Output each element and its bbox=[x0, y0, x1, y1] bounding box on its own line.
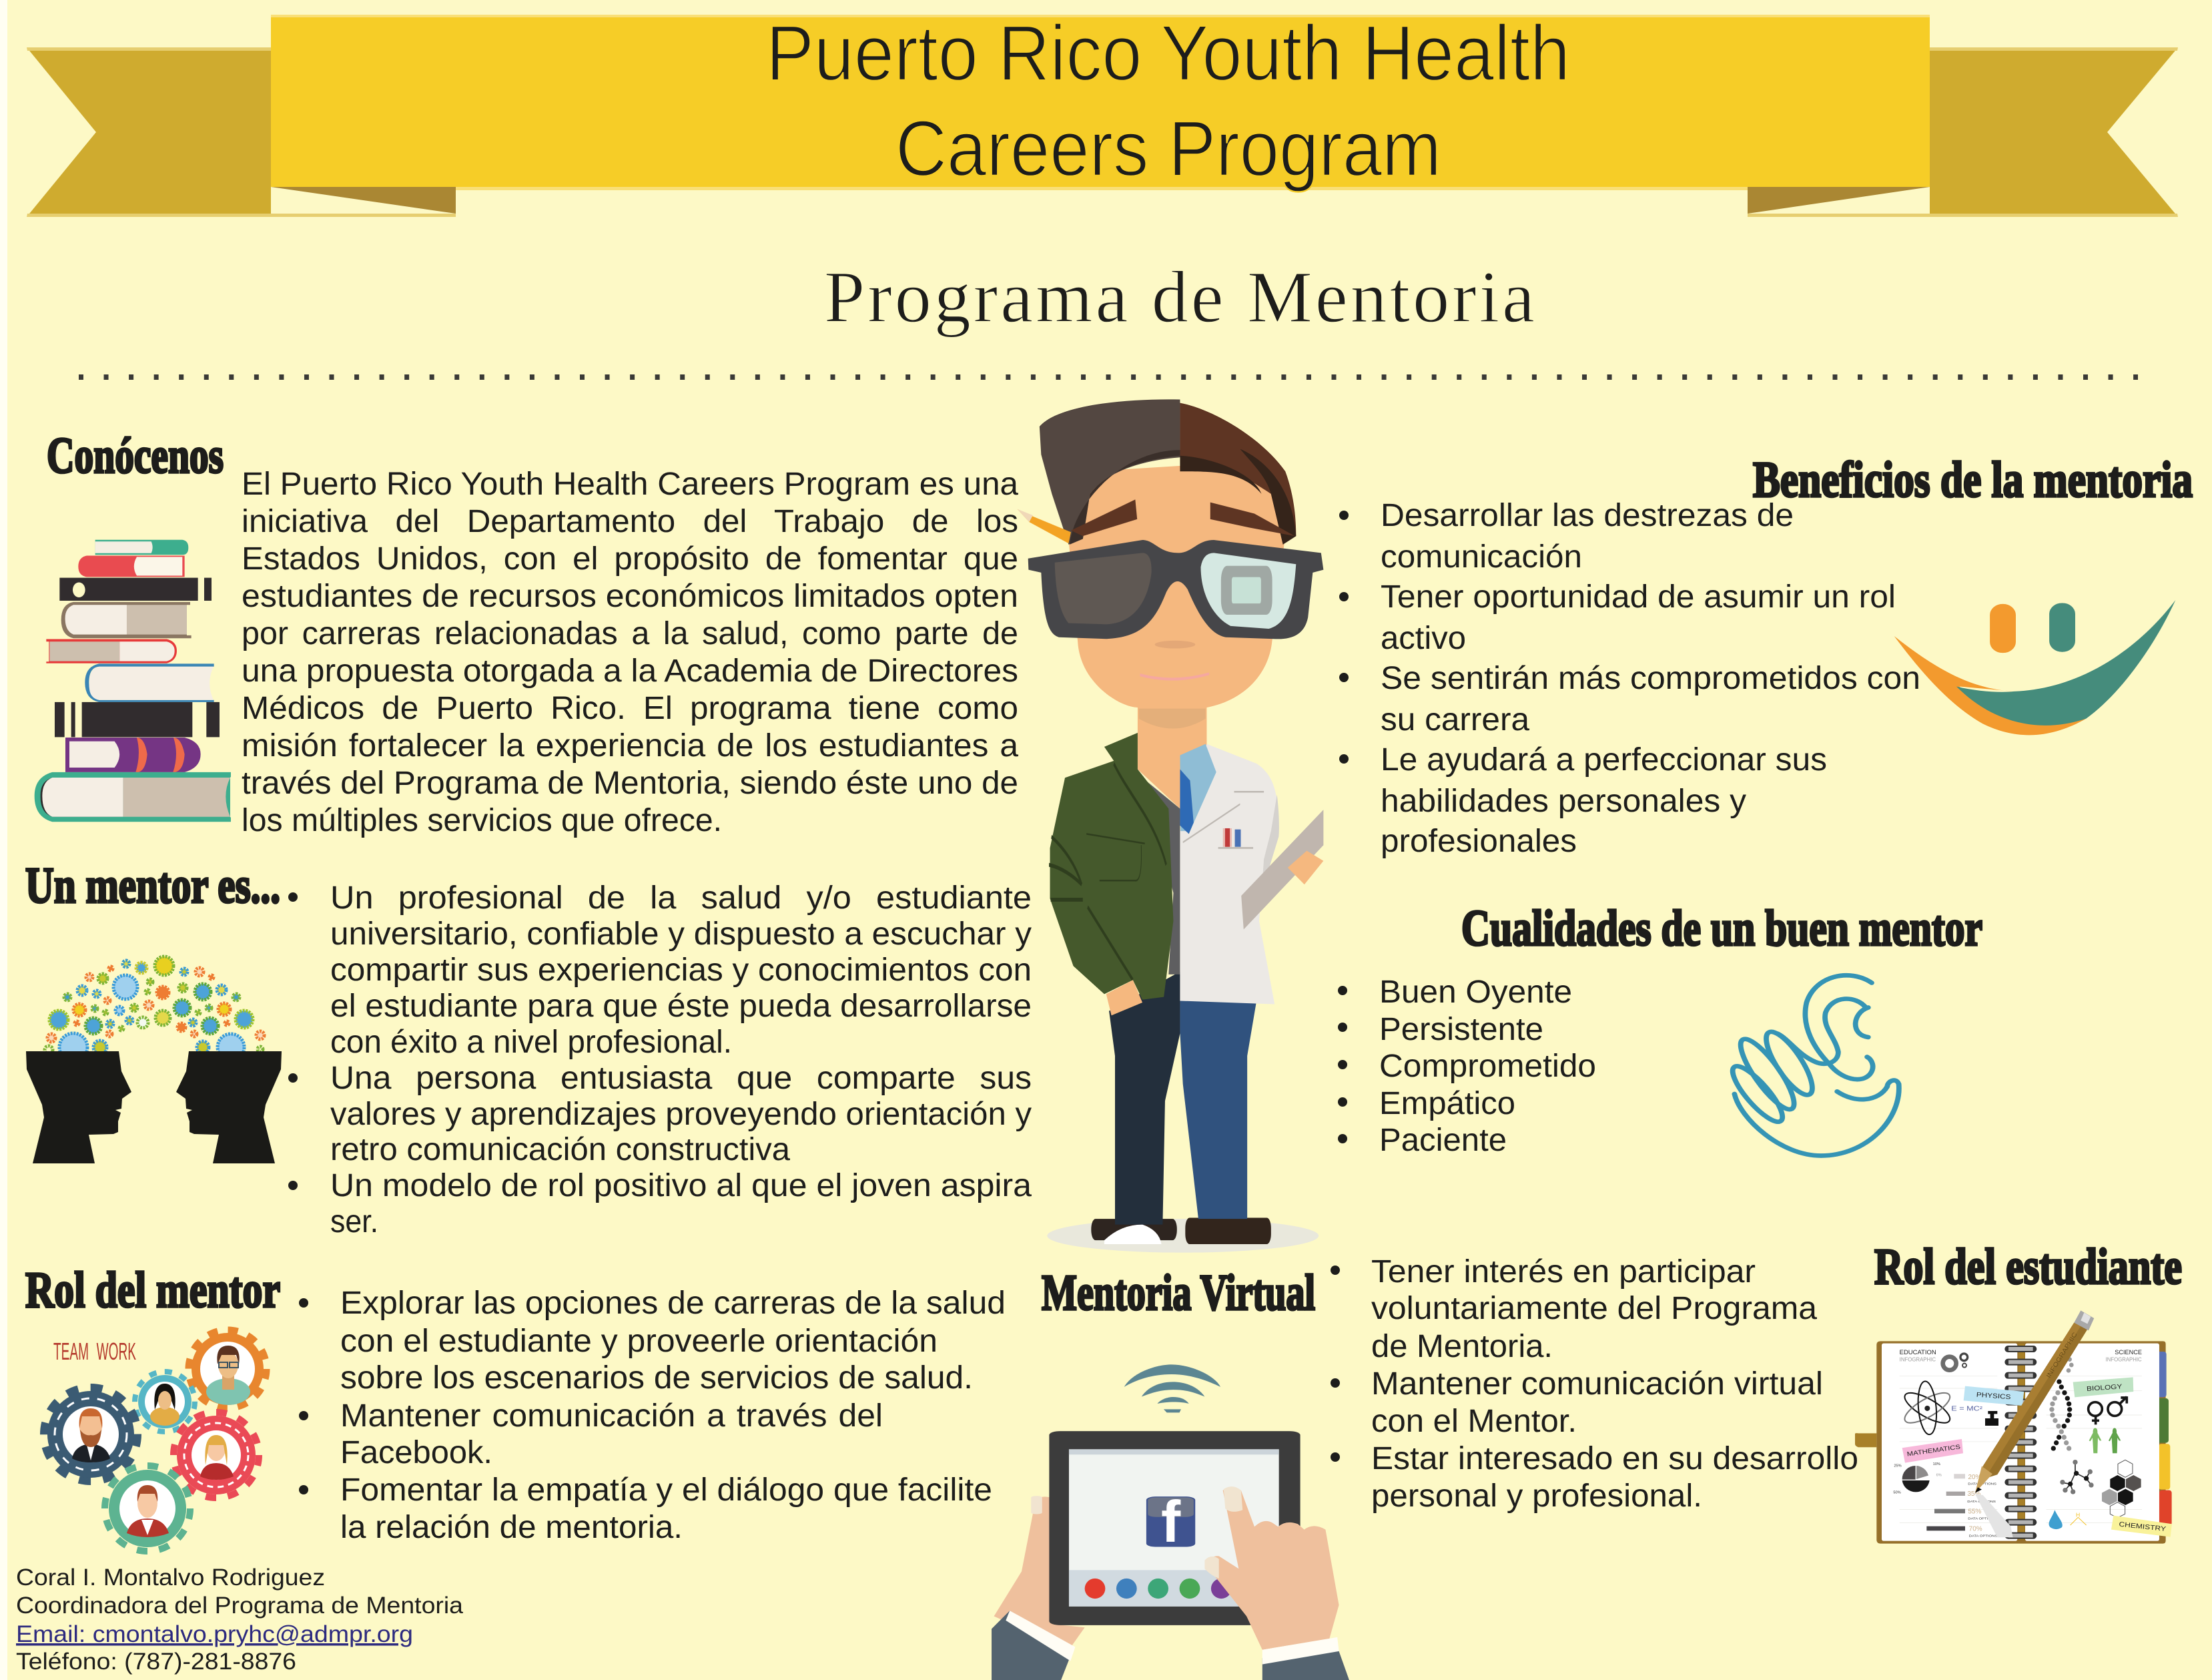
illustration: half student half doctor character bbox=[1018, 399, 1323, 1253]
section: Beneficios de la mentoria bbox=[1339, 452, 2193, 859]
bullet list: Un mentor es: con éxito a nivel profesional. bbox=[330, 1025, 732, 1060]
chart: progress bars: DATA OPTIONS bbox=[1969, 1534, 1997, 1538]
icon: pencil: INFOGRAPHIC bbox=[2045, 1331, 2079, 1379]
icon: dna bbox=[2049, 1357, 2074, 1451]
chart: progress bars: DATA OPTIONS bbox=[1967, 1500, 1996, 1503]
section: Rol del estudiante bbox=[1855, 1239, 2182, 1544]
bullet list: Rol del mentor: Mantener comunicación a través del bbox=[340, 1398, 883, 1434]
chart: progress bars: 35% bbox=[1967, 1490, 1980, 1498]
title bbox=[766, 9, 1570, 193]
icon: hexagons bbox=[2102, 1460, 2141, 1518]
icon: wifi bbox=[1124, 1364, 1220, 1412]
title: Puerto Rico Youth Health bbox=[766, 9, 1570, 97]
chart: pie: 6% bbox=[1936, 1474, 1942, 1478]
note: chemistry bbox=[2111, 1516, 2172, 1537]
bullet list: Un mentor es bbox=[288, 880, 1032, 1239]
bullet list: mentoria virtual: Tener interés en participar bbox=[1371, 1254, 1756, 1290]
chart: pie bbox=[1893, 1462, 1942, 1495]
text block: Conócenos paragraph: Estados Unidos, con el propósito de fomentar que bbox=[242, 541, 1018, 577]
chart: pie: 25% bbox=[1894, 1464, 1902, 1468]
notebook page labels: INFOGRAPHIC bbox=[1900, 1356, 1936, 1362]
contact details: Email: cmontalvo.pryhc@admpr.org bbox=[16, 1621, 413, 1647]
contact details: Coordinadora del Programa de Mentoria bbox=[16, 1593, 464, 1619]
bullet list: beneficios: habilidades personales y bbox=[1381, 784, 1746, 819]
bullet list: Rol del mentor bbox=[299, 1286, 1006, 1545]
icon: pencil bbox=[1975, 1310, 2094, 1493]
bullet list: mentoria virtual: personal y profesional. bbox=[1371, 1478, 1702, 1514]
bullet list: Rol del mentor: Explorar las opciones de carreras de la salud bbox=[340, 1286, 1006, 1321]
bullet list: beneficios: Desarrollar las destrezas de bbox=[1381, 498, 1794, 533]
chart: progress bars: DATA OPTIONS bbox=[1968, 1517, 1996, 1520]
bullet list: beneficios: profesionales bbox=[1381, 824, 1577, 859]
gear: orange bbox=[189, 1330, 266, 1408]
bullet list: Un mentor es: Un modelo de rol positivo al que el joven aspira bbox=[330, 1168, 1032, 1203]
icon: stack of books bbox=[35, 540, 231, 822]
banner ribbon bbox=[27, 15, 2178, 217]
contact details: Teléfono: (787)-281-8876 bbox=[16, 1649, 296, 1675]
text block: Conócenos paragraph: misión fortalecer la experiencia de los estudiantes a bbox=[242, 728, 1018, 764]
bullet list: beneficios: Le ayudará a perfeccionar sus bbox=[1381, 742, 1827, 778]
note: physics bbox=[1964, 1386, 2024, 1406]
chart: pie: 50% bbox=[1893, 1491, 1901, 1495]
heading: Cualidades: Cualidades de un buen mentor bbox=[1461, 900, 1982, 956]
chart: progress bars: 55% bbox=[1968, 1508, 1981, 1515]
bullet list: cualidades: Comprometido bbox=[1379, 1049, 1596, 1084]
bullet list: cualidades: Empático bbox=[1379, 1086, 1515, 1121]
section: Mentoria Virtual bbox=[992, 1254, 1858, 1680]
bullet list: Un mentor es: el estudiante para que éste pueda desarrollarse bbox=[330, 989, 1032, 1024]
note: mathematics: MATHEMATICS bbox=[1906, 1443, 1960, 1458]
gear: red bbox=[173, 1412, 259, 1498]
gear: navy bbox=[44, 1388, 137, 1481]
contact details bbox=[16, 1565, 464, 1675]
icon: molecule bbox=[2060, 1460, 2094, 1494]
bullet list: beneficios bbox=[1339, 498, 1920, 859]
bullet list: Un mentor es: valores y aprendizajes proveyendo orientación y bbox=[330, 1097, 1032, 1132]
heading: Un mentor es: Un mentor es... bbox=[25, 858, 280, 914]
bullet list: Un mentor es: Una persona entusiasta que comparte sus bbox=[330, 1061, 1032, 1096]
bullet list: cualidades: Paciente bbox=[1379, 1123, 1507, 1158]
bullet list: Rol del mentor: con el estudiante y proveerle orientación bbox=[340, 1324, 938, 1359]
bullet list: mentoria virtual: de Mentoria. bbox=[1371, 1329, 1553, 1364]
section: Rol del mentor bbox=[25, 1262, 1006, 1551]
note: mathematics bbox=[1902, 1439, 1963, 1463]
bullet list: mentoria virtual: con el Mentor. bbox=[1371, 1404, 1577, 1439]
chart: progress bars: 20% bbox=[1968, 1474, 1981, 1481]
icon: notebook and pencil: E = MC² bbox=[1951, 1405, 1983, 1412]
section: Conócenos bbox=[35, 428, 1018, 838]
notebook page labels: INFOGRAPHIC bbox=[2106, 1356, 2142, 1362]
icon: two heads with gears bbox=[20, 956, 287, 1163]
chart: pie: 10% bbox=[1933, 1462, 1940, 1466]
bullet list: mentoria virtual: Estar interesado en su desarrollo bbox=[1371, 1441, 1858, 1476]
icon: smile bbox=[1894, 600, 2175, 735]
text block: Conócenos paragraph bbox=[242, 467, 1018, 838]
text block: Conócenos paragraph: por carreras relacionadas a la salud, como parte de bbox=[242, 616, 1018, 651]
label: team work: TEAM WORK bbox=[53, 1338, 136, 1365]
bullet list: Rol del mentor: la relación de mentoria. bbox=[340, 1510, 683, 1545]
section: Un mentor es bbox=[20, 858, 1032, 1239]
bullet list: Un mentor es: compartir sus experiencias y conocimientos con bbox=[330, 952, 1032, 988]
text block: Conócenos paragraph: una propuesta otorgada a la Academia de Directores bbox=[242, 653, 1018, 689]
icon: hand and ear bbox=[1725, 975, 1899, 1156]
heading: Rol del mentor: Rol del mentor bbox=[25, 1262, 280, 1318]
bullet list: Un mentor es: ser. bbox=[330, 1204, 378, 1239]
text block: Conócenos paragraph: los múltiples servicios que ofrece. bbox=[242, 803, 722, 838]
text block: Conócenos paragraph: Médicos de Puerto Rico. El programa tiene como bbox=[242, 691, 1018, 726]
note: physics: PHYSICS bbox=[1976, 1392, 2011, 1401]
text block: Conócenos paragraph: iniciativa del Departamento del Trabajo de los bbox=[242, 504, 1018, 539]
notebook page labels: EDUCATION bbox=[1900, 1349, 1936, 1356]
text block: Conócenos paragraph: El Puerto Rico Youth Health Careers Program es una bbox=[242, 467, 1018, 502]
bullet list: beneficios: comunicación bbox=[1381, 539, 1582, 575]
bullet list: Rol del mentor: sobre los escenarios de servicios de salud. bbox=[340, 1360, 973, 1396]
heading: Mentoria Virtual: Mentoria Virtual bbox=[1042, 1265, 1315, 1321]
notebook page labels bbox=[1900, 1349, 2142, 1362]
bullet list: cualidades bbox=[1338, 974, 1596, 1158]
icon: team gears bbox=[44, 1330, 266, 1551]
icon: atom bbox=[1900, 1380, 1954, 1435]
bullet list: beneficios: su carrera bbox=[1381, 702, 1529, 738]
gear: green bbox=[105, 1466, 190, 1551]
gear: light blue bbox=[135, 1372, 195, 1432]
text block: Conócenos paragraph: través del Programa de Mentoria, siendo éste uno de bbox=[242, 766, 1018, 801]
bullet list: Rol del mentor: Fomentar la empatía y el diálogo que facilite bbox=[340, 1472, 992, 1508]
icon: water drop bbox=[2049, 1510, 2063, 1529]
note: biology: BIOLOGY bbox=[2087, 1383, 2123, 1393]
bullet list: beneficios: activo bbox=[1381, 621, 1466, 656]
text block: Conócenos paragraph: estudiantes de recursos económicos limitados opten bbox=[242, 579, 1018, 614]
icon: facebook logo: f bbox=[1161, 1488, 1181, 1555]
bullet list: cualidades: Buen Oyente bbox=[1379, 974, 1572, 1010]
title: Careers Program bbox=[895, 105, 1441, 193]
icon: notebook and pencil: H bbox=[2076, 1512, 2080, 1518]
chart: progress bars bbox=[1926, 1474, 1997, 1538]
bullet list: Un mentor es: Un profesional de la salud y/o estudiante bbox=[330, 880, 1032, 916]
icon: tablet with hands and wifi bbox=[992, 1364, 1349, 1680]
bullet list: cualidades: Persistente bbox=[1379, 1012, 1543, 1047]
chart: progress bars: DATA OPTIONS bbox=[1968, 1482, 1996, 1486]
bullet list: mentoria virtual: voluntariamente del Programa bbox=[1371, 1291, 1817, 1326]
notebook page labels: SCIENCE bbox=[2115, 1349, 2142, 1356]
icon: notebook and pencil bbox=[1855, 1310, 2172, 1544]
bullet list: Rol del mentor: Facebook. bbox=[340, 1435, 492, 1470]
heading: Conócenos: Conócenos bbox=[47, 428, 224, 484]
section: Cualidades de un buen mentor bbox=[1338, 900, 1982, 1158]
chart: progress bars: 70% bbox=[1969, 1525, 1982, 1532]
bullet list: Un mentor es: universitario, confiable y dispuesto a escuchar y bbox=[330, 916, 1032, 952]
bullet list: Un mentor es: retro comunicación constructiva bbox=[330, 1132, 790, 1167]
bullet list: mentoria virtual: Mantener comunicación virtual bbox=[1371, 1366, 1823, 1402]
note: biology bbox=[2073, 1377, 2133, 1397]
bullet list: beneficios: Tener oportunidad de asumir un rol bbox=[1381, 579, 1896, 615]
bullet list: mentoria virtual bbox=[1331, 1254, 1858, 1514]
contact details: Coral I. Montalvo Rodriguez bbox=[16, 1565, 325, 1591]
note: chemistry: CHEMISTRY bbox=[2119, 1521, 2167, 1533]
bullet list: beneficios: Se sentirán más comprometidos con bbox=[1381, 661, 1920, 696]
subtitle: Programa de Mentoria bbox=[824, 256, 1535, 338]
